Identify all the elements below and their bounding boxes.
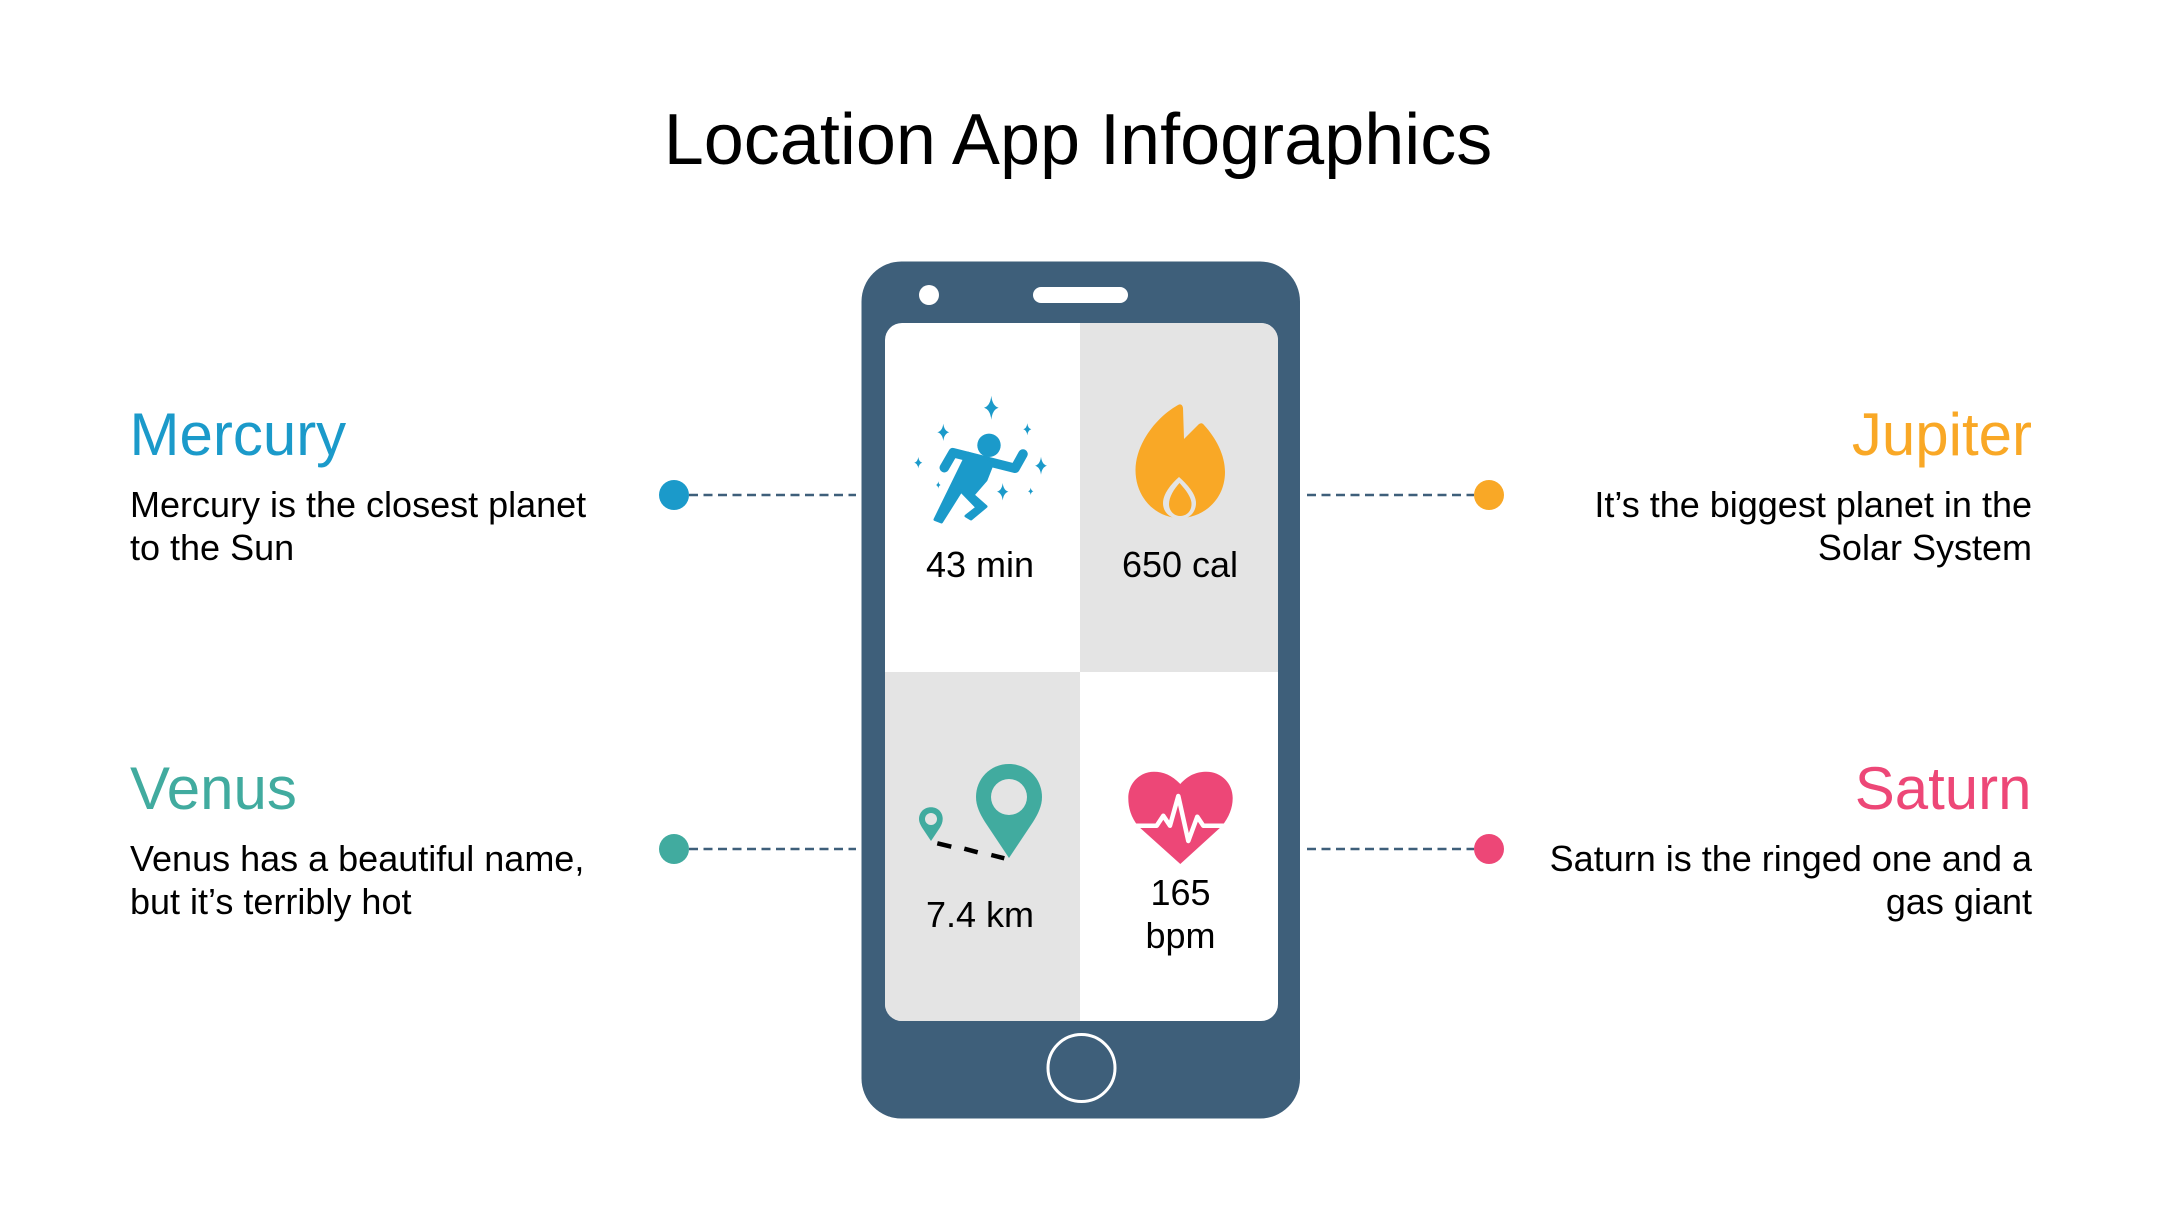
icon: heart with pulse (1128, 772, 1233, 864)
text: Saturn description: gas giant (1886, 881, 2032, 922)
label: 165 bpm: 165 (1150, 872, 1211, 913)
connector: Jupiter (1307, 480, 1504, 510)
text: Jupiter description: It’s the biggest planet in the (1594, 484, 2032, 525)
text: Saturn description: Saturn is the ringed one and a (1550, 838, 2033, 879)
icon: flame (1136, 404, 1225, 518)
panel: Jupiter (1594, 401, 2032, 568)
heading: Mercury: Mercury (130, 401, 346, 468)
panel: Saturn (1550, 755, 2033, 922)
connector: Mercury (659, 480, 856, 510)
phone speaker (1033, 287, 1128, 303)
phone body (862, 262, 1300, 1118)
icon: runner with sparkles (914, 396, 1047, 522)
text: Mercury description: Mercury is the closest planet (130, 484, 586, 525)
text: Mercury description: to the Sun (130, 527, 294, 568)
text: Venus description: Venus has a beautiful name, (130, 838, 584, 879)
panel: Mercury (130, 401, 586, 568)
heading: Venus: Venus (130, 755, 297, 822)
icon: route with map pins (919, 764, 1042, 858)
heading: Jupiter: Jupiter (1852, 401, 2032, 468)
title: Location App Infographics (664, 100, 1492, 180)
label: 7.4 km: 7.4 km (926, 894, 1034, 935)
connector: Venus (659, 834, 856, 864)
phone screen (885, 323, 1278, 1021)
heading: Saturn: Saturn (1855, 755, 2032, 822)
text: Venus description: but it’s terribly hot (130, 881, 411, 922)
phone home button (1048, 1034, 1115, 1102)
label: 43 min: 43 min (926, 544, 1034, 585)
connector: Saturn (1307, 834, 1504, 864)
phone camera (919, 285, 939, 305)
text: Jupiter description: Solar System (1818, 527, 2032, 568)
phone (862, 262, 1300, 1118)
panel: Venus (130, 755, 584, 922)
label: 165 bpm: bpm (1145, 915, 1216, 956)
label: 650 cal: 650 cal (1122, 544, 1238, 585)
